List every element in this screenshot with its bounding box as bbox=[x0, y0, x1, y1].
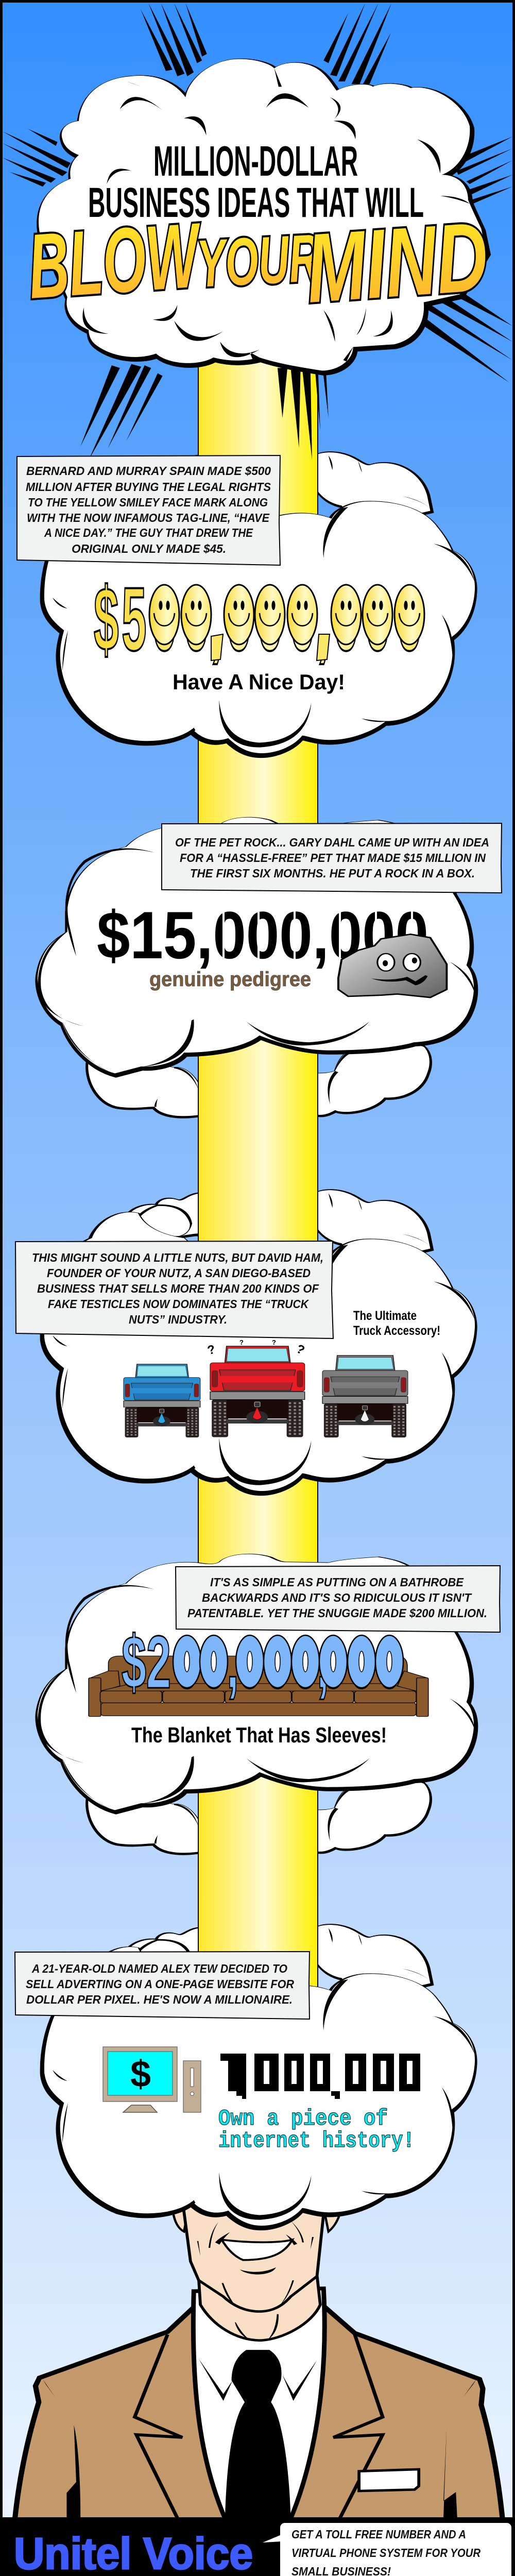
shirt bbox=[193, 2289, 324, 2519]
panel: truck nuts bbox=[15, 1212, 475, 1493]
caption bbox=[176, 1566, 500, 1632]
heading: MILLION-DOLLAR bbox=[153, 137, 358, 185]
name tag bbox=[359, 2469, 419, 2491]
icon: pet rock bbox=[338, 934, 447, 997]
caption: FOUNDER OF YOUR NUTZ, A SAN DIEGO-BASED bbox=[47, 1266, 311, 1280]
caption: OF THE PET ROCK... GARY DAHL CAME UP WITH AN IDEA bbox=[175, 836, 489, 849]
question marks bbox=[206, 1338, 307, 1358]
cloud bbox=[38, 818, 475, 1075]
panel: smiley face bbox=[17, 455, 475, 755]
figure: 200 million: $200,000,000 bbox=[122, 1621, 402, 1704]
caption: SELL ADVERTING ON A ONE-PAGE WEBSITE FOR bbox=[26, 1977, 294, 1991]
speech bubble: offer: GET A TOLL FREE NUMBER AND A bbox=[291, 2528, 466, 2541]
tagline: Have A Nice Day! bbox=[173, 670, 345, 694]
tie bbox=[225, 2350, 290, 2519]
blow your mind wordmark: BLOW bbox=[25, 204, 206, 318]
caption: BERNARD AND MURRAY SPAIN MADE $500 bbox=[26, 464, 271, 478]
caption bbox=[162, 823, 502, 893]
icon: blue truck bbox=[124, 1364, 200, 1437]
panel: million dollar homepage bbox=[15, 1947, 475, 2228]
burst rays bbox=[3, 3, 512, 460]
cloud bbox=[38, 1554, 475, 1812]
lower lip and face lines bbox=[197, 2221, 314, 2340]
icon: computer: $ bbox=[130, 2054, 151, 2095]
back cloud puffs bbox=[88, 452, 431, 2000]
yellow light beam bbox=[198, 355, 318, 2035]
caption: FAKE TESTICLES NOW DOMINATES THE “TRUCK bbox=[48, 1297, 309, 1311]
tagline bbox=[353, 1309, 440, 1338]
tagline: The Blanket That Has Sleeves! bbox=[131, 1723, 387, 1747]
caption: A NICE DAY.” THE GUY THAT DREW THE bbox=[44, 526, 253, 539]
caption: A 21-YEAR-OLD NAMED ALEX TEW DECIDED TO bbox=[31, 1962, 287, 1975]
icon: couch bbox=[89, 1656, 428, 1717]
man in suit bbox=[15, 2199, 503, 2520]
panel: pet rock bbox=[38, 818, 502, 1075]
collar lines bbox=[199, 2359, 317, 2401]
tagline: Truck Accessory! bbox=[353, 1324, 440, 1338]
figure: 15 million: $15,000,000 bbox=[97, 897, 428, 973]
footer band bbox=[0, 2517, 515, 2576]
tagline bbox=[218, 2106, 415, 2154]
figure: 500 million: $500,000,000 bbox=[94, 569, 422, 670]
tagline: Own a piece of bbox=[218, 2106, 388, 2132]
face bbox=[182, 2199, 325, 2312]
heading bbox=[88, 137, 424, 226]
caption: PATENTABLE. YET THE SNUGGIE MADE $200 MILLION. bbox=[187, 1606, 487, 1620]
caption: MILLION AFTER BUYING THE LEGAL RIGHTS bbox=[26, 480, 271, 494]
caption: TO THE YELLOW SMILEY FACE MARK ALONG bbox=[28, 496, 268, 509]
jacket seams bbox=[43, 2379, 476, 2518]
caption: DOLLAR PER PIXEL. HE'S NOW A MILLIONAIRE. bbox=[26, 1993, 293, 2006]
caption: FOR A “HASSLE-FREE” PET THAT MADE $15 MILLION IN bbox=[180, 851, 486, 865]
caption: BACKWARDS AND IT'S SO RIDICULOUS IT ISN'T bbox=[202, 1591, 472, 1604]
tagline: internet history! bbox=[218, 2128, 415, 2154]
caption: WITH THE NOW INFAMOUS TAG-LINE, “HAVE bbox=[27, 511, 270, 524]
lapels bbox=[134, 2334, 383, 2518]
question marks: ? bbox=[206, 1342, 217, 1358]
caption bbox=[17, 455, 280, 565]
icon: computer bbox=[103, 2047, 201, 2112]
question marks: ? bbox=[294, 1342, 307, 1358]
caption: THE FIRST SIX MONTHS. HE PUT A ROCK IN A BOX. bbox=[190, 867, 475, 880]
caption: THIS MIGHT SOUND A LITTLE NUTS, BUT DAVID HAM, bbox=[32, 1251, 323, 1264]
cloud bbox=[43, 1947, 475, 2228]
caption: IT'S AS SIMPLE AS PUTTING ON A BATHROBE bbox=[210, 1575, 464, 1589]
question marks: ? bbox=[272, 1338, 276, 1346]
speech bubble: offer bbox=[263, 2523, 511, 2576]
figure: 1 million: 1,000,000 bbox=[219, 2045, 420, 2103]
caption: ORIGINAL ONLY MADE $45. bbox=[72, 542, 226, 555]
caption bbox=[15, 1952, 310, 2019]
cloud bbox=[43, 474, 475, 755]
neck bbox=[199, 2275, 320, 2341]
blow your mind wordmark: YOUR bbox=[195, 220, 321, 301]
tagline: The Ultimate bbox=[353, 1309, 417, 1323]
caption: NUTS” INDUSTRY. bbox=[129, 1313, 227, 1326]
jacket bbox=[15, 2308, 503, 2520]
cloud bbox=[43, 1212, 475, 1493]
icon: red truck bbox=[210, 1346, 305, 1437]
panel: snuggie bbox=[38, 1554, 500, 1812]
mouth bbox=[222, 2240, 293, 2260]
caption bbox=[15, 1241, 333, 1338]
question marks: ? bbox=[239, 1338, 244, 1346]
tagline: genuine pedigree bbox=[149, 968, 311, 991]
title cloud bbox=[25, 59, 491, 372]
cloud shape bbox=[39, 59, 487, 372]
icon: grey truck bbox=[322, 1355, 408, 1437]
ears bbox=[173, 2207, 341, 2232]
blow your mind wordmark bbox=[25, 202, 491, 324]
speech bubble: offer: VIRTUAL PHONE SYSTEM FOR YOUR bbox=[291, 2546, 480, 2560]
caption: BUSINESS THAT SELLS MORE THAN 200 KINDS OF bbox=[37, 1282, 319, 1295]
